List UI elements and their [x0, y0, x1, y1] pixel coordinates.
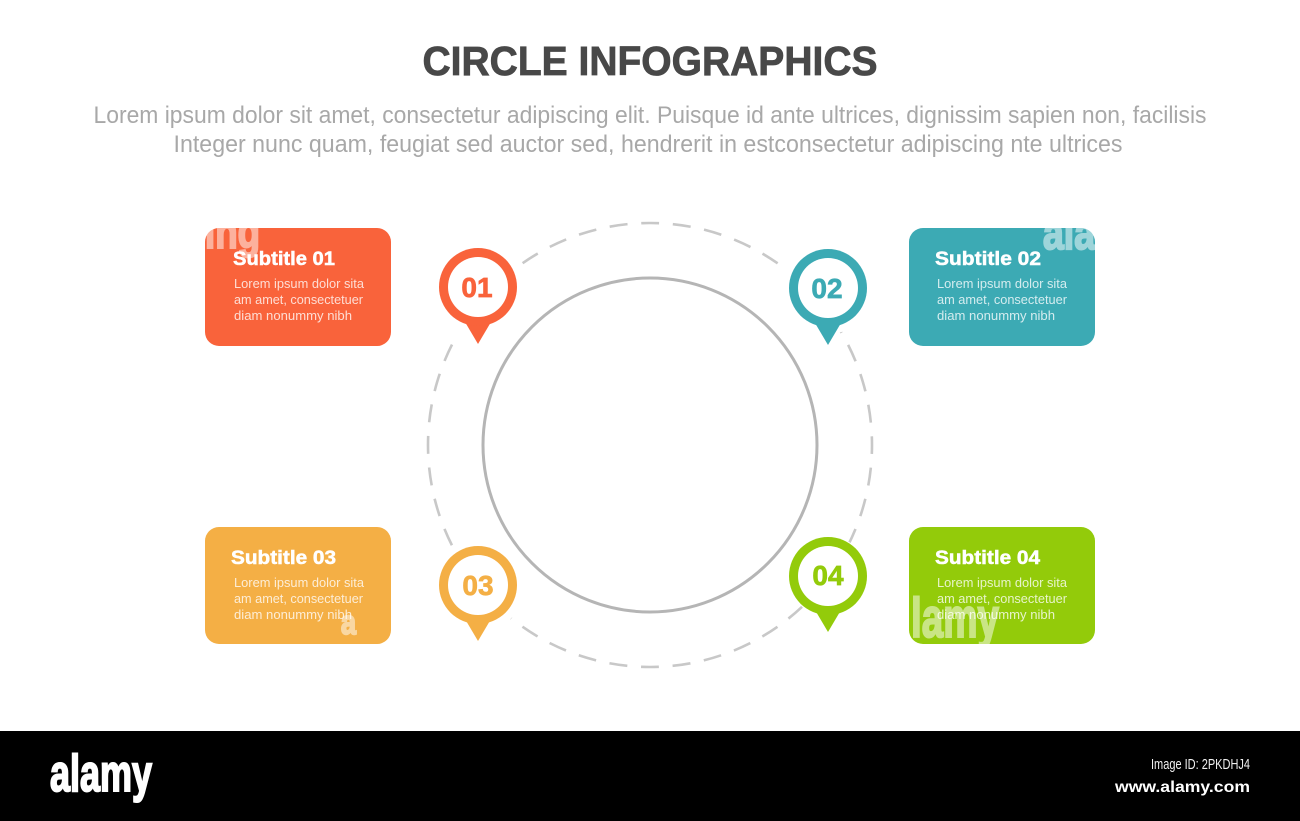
footer bar [0, 731, 1300, 821]
panel: subtitle 02: Lorem ipsum dolor sita [937, 277, 1067, 291]
intro text: Integer nunc quam, feugiat sed auctor sed, hendrerit in estconsectetur adipiscing nte ultrices [174, 131, 1122, 158]
panel: subtitle 01: diam nonummy nibh [234, 309, 352, 323]
panel: subtitle 02: am amet, consectetuer [937, 293, 1067, 307]
panel: subtitle 02: diam nonummy nibh [937, 309, 1055, 323]
pin 03 [439, 546, 517, 641]
panel: subtitle 04: am amet, consectetuer [937, 592, 1067, 606]
panel: subtitle 03: diam nonummy nibh [234, 608, 352, 622]
panel: subtitle 03: Lorem ipsum dolor sita [234, 576, 364, 590]
panel: subtitle 01: Lorem ipsum dolor sita [234, 277, 364, 291]
panel: subtitle 04: lamy [911, 586, 999, 649]
pin 04: 04 [812, 560, 844, 591]
intro text: Lorem ipsum dolor sit amet, consectetur adipiscing elit. Puisque id ante ultrices, dignissim sapien non, facilisis [94, 102, 1206, 129]
panel: subtitle 02 [909, 228, 1095, 346]
panel: subtitle 02: ala [1043, 207, 1095, 259]
panel: subtitle 04: Lorem ipsum dolor sita [937, 576, 1067, 590]
footer bar: Image ID: 2PKDHJ4 [1151, 756, 1250, 773]
panel: subtitle 04: diam nonummy nibh [937, 608, 1055, 622]
pin 03: 03 [462, 570, 494, 601]
panel: subtitle 04 [909, 527, 1095, 649]
panel: subtitle 04: Subtitle 04 [935, 548, 1040, 569]
panel: subtitle 03: am amet, consectetuer [234, 592, 363, 606]
footer bar: www.alamy.com [1114, 779, 1250, 796]
title: CIRCLE INFOGRAPHICS [422, 38, 878, 84]
pin 04 [789, 537, 867, 632]
panel: subtitle 02: Subtitle 02 [935, 249, 1041, 270]
pin 01 [439, 248, 517, 344]
panel: subtitle 03: Subtitle 03 [231, 548, 336, 569]
pin 02: 02 [811, 273, 843, 304]
central circle [483, 278, 817, 612]
panel: subtitle 01: ing [205, 206, 260, 258]
intro text [94, 102, 1206, 158]
panel: subtitle 01: Subtitle 01 [233, 249, 335, 270]
dashed outer ring [428, 223, 872, 667]
panel: subtitle 03: a [341, 604, 357, 642]
panel: subtitle 01: am amet, consectetuer [234, 293, 363, 307]
panel: subtitle 01 [205, 228, 391, 346]
panel: subtitle 03 [205, 527, 391, 644]
pin 01: 01 [461, 272, 493, 303]
footer bar: alamy [50, 745, 152, 803]
pin 02 [789, 249, 867, 345]
pin gaps in the ring [428, 237, 874, 632]
